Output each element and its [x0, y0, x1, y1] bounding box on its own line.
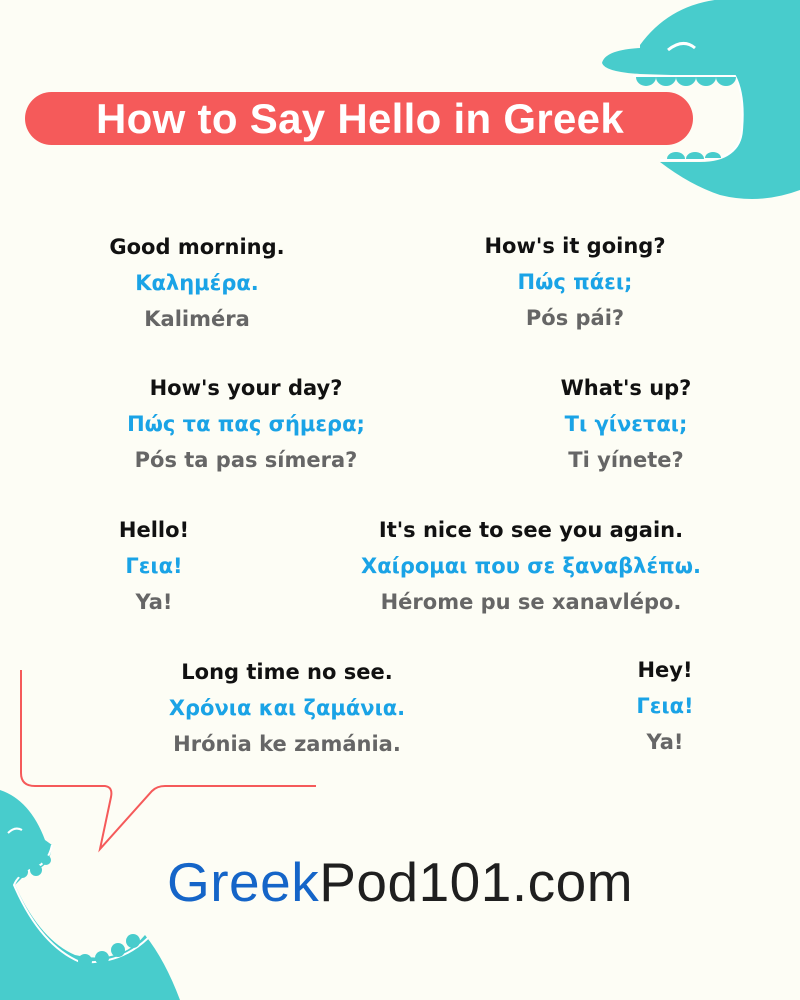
phrase: hey: Ya! [646, 730, 684, 754]
phrase: good morning [109, 235, 285, 331]
phrase: nice to see you: Hérome pu se xanavlépo. [381, 590, 681, 614]
phrase: nice to see you: It's nice to see you again. [379, 518, 683, 542]
logo: GreekPod101.com [167, 851, 633, 913]
phrase: how's your day: How's your day? [150, 376, 342, 400]
phrase: how's your day: Πώς τα πας σήμερα; [127, 412, 365, 436]
phrase: how's your day [127, 376, 365, 472]
phrase: how's your day: Pós ta pas símera? [135, 448, 357, 472]
phrase: what's up: Τι γίνεται; [565, 412, 687, 436]
phrase: how's it going: How's it going? [484, 234, 666, 258]
phrase: long time no see: Hrónia ke zamánia. [173, 732, 401, 756]
phrase: what's up [561, 376, 691, 472]
phrase: what's up: What's up? [561, 376, 691, 400]
phrase: what's up: Ti yínete? [568, 448, 684, 472]
phrase: hello: Ya! [135, 590, 173, 614]
phrase: hello [119, 518, 189, 614]
phrase: how's it going [484, 234, 666, 330]
phrase: long time no see: Χρόνια και ζαμάνια. [169, 696, 405, 720]
phrase: good morning: Good morning. [109, 235, 285, 259]
phrase: long time no see [169, 660, 405, 756]
phrase: hey: Hey! [637, 658, 693, 682]
phrase: hello: Hello! [119, 518, 189, 542]
phrase: long time no see: Long time no see. [181, 660, 393, 684]
phrase: hey [636, 658, 694, 754]
phrase: hello: Γεια! [125, 554, 183, 578]
phrase: nice to see you: Χαίρομαι που σε ξαναβλέπω. [361, 554, 701, 578]
phrase: nice to see you [361, 518, 701, 614]
phrase: hey: Γεια! [636, 694, 694, 718]
phrase: how's it going: Pós pái? [526, 306, 624, 330]
title banner: How to Say Hello in Greek [96, 95, 624, 142]
phrase: good morning: Καλημέρα. [135, 271, 259, 295]
phrase: how's it going: Πώς πάει; [518, 270, 632, 294]
phrase: good morning: Kaliméra [144, 307, 250, 331]
